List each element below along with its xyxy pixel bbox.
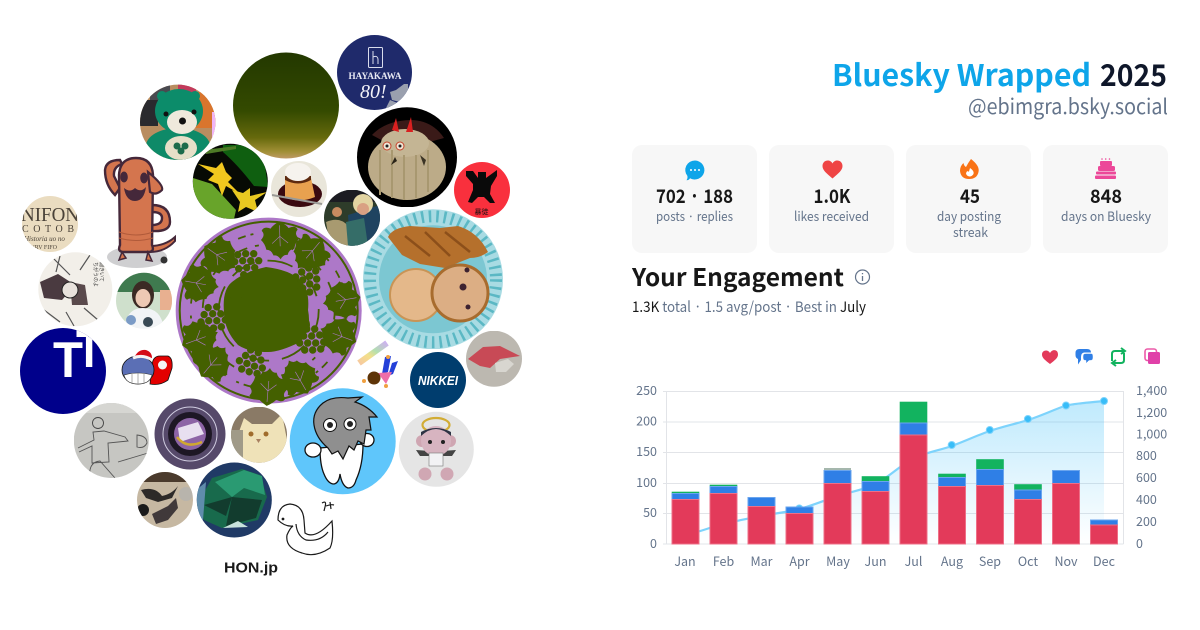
month labels: Sep bbox=[979, 551, 1001, 570]
avatar: dark green gradient photo bbox=[233, 52, 339, 159]
avatar: red brick model bbox=[466, 331, 522, 387]
avatar: manga panel bbox=[38, 252, 113, 327]
right axis labels: 1,000 bbox=[1136, 424, 1167, 442]
handle: @ebimgra.bsky.social bbox=[968, 91, 1168, 121]
title year: 2025 bbox=[1100, 51, 1167, 95]
left axis labels: 50 bbox=[643, 502, 657, 521]
avatar: Hayakawa 80 logo: 80! bbox=[360, 81, 387, 103]
avatar: red wrestler silhouette: 暴徒 bbox=[474, 207, 488, 217]
month labels: Jan bbox=[674, 551, 696, 570]
right axis labels: 600 bbox=[1136, 467, 1157, 486]
title: Bluesky Wrapped bbox=[832, 51, 1091, 95]
month labels: Dec bbox=[1093, 551, 1116, 570]
month labels: Oct bbox=[1018, 551, 1038, 570]
card: posts and replies bbox=[632, 145, 757, 253]
avatar: manga panel: 聞きいて bbox=[98, 262, 105, 282]
icon: info bbox=[856, 270, 870, 284]
grape clusters bbox=[194, 250, 327, 380]
bar: Jan bbox=[672, 492, 699, 544]
chart: monthly engagement bbox=[636, 380, 1167, 570]
bar: Oct bbox=[1014, 484, 1042, 544]
stat label: likes received bbox=[794, 206, 869, 225]
bar: Jul bbox=[900, 402, 927, 544]
bar: Aug bbox=[938, 474, 966, 544]
bar: Apr bbox=[786, 507, 813, 544]
icon: heart bbox=[822, 160, 842, 178]
stat value: 45 bbox=[960, 182, 980, 209]
avatar: Nifon Cotoba book page: Historia uo no bbox=[23, 235, 65, 243]
card: days on Bluesky bbox=[1043, 145, 1168, 253]
avatar: green teddy bear bbox=[140, 84, 216, 164]
month labels: Feb bbox=[713, 551, 734, 570]
bar: Mar bbox=[748, 498, 775, 544]
month labels: Jun bbox=[865, 551, 886, 570]
avatar: navy TI logo: I bbox=[83, 328, 95, 377]
cumulative line bbox=[685, 401, 1104, 535]
stat label: days on Bluesky bbox=[1061, 206, 1151, 225]
month labels: Nov bbox=[1054, 551, 1078, 570]
logo: HON.jp: HON.jp bbox=[224, 560, 278, 576]
avatar: red wrestler silhouette bbox=[454, 162, 510, 218]
right axis labels: 1,200 bbox=[1136, 402, 1167, 421]
icon: likes bbox=[1042, 350, 1058, 364]
month labels: Mar bbox=[750, 551, 773, 570]
month labels: Aug bbox=[941, 551, 963, 570]
left axis labels: 0 bbox=[650, 533, 657, 552]
avatar: Nifon Cotoba book page: COTOB bbox=[22, 224, 74, 235]
engagement summary: 1.3K total · 1.5 avg/post · Best in July bbox=[632, 296, 866, 317]
icon: replies bbox=[1076, 349, 1093, 364]
avatar: grey-haired monster on sky blue bbox=[289, 388, 397, 496]
right axis labels bbox=[1136, 380, 1167, 552]
avatar: angel figure bbox=[398, 411, 474, 487]
card: likes received bbox=[769, 145, 894, 253]
icon: flame bbox=[960, 159, 979, 179]
sticker: snake doodle bbox=[278, 502, 334, 555]
cumulative area bbox=[685, 402, 1104, 544]
sticker: whale with santa hat bbox=[122, 350, 172, 384]
header bbox=[832, 51, 1168, 121]
avatar: Hayakawa 80 logo: HAYAKAWA bbox=[348, 71, 402, 81]
bar: Nov bbox=[1052, 470, 1080, 544]
avatar: navy TI logo bbox=[20, 328, 106, 414]
right axis labels: 800 bbox=[1136, 445, 1157, 464]
icon: chat bubble bbox=[685, 160, 704, 180]
left axis labels: 150 bbox=[636, 441, 657, 460]
avatar: Nikkei logo: NIKKEI bbox=[418, 373, 458, 388]
avatar collage bbox=[20, 35, 522, 576]
avatar: cats on a table bbox=[137, 472, 193, 528]
bar: Jun bbox=[862, 476, 889, 544]
avatar: Hayakawa 80 logo bbox=[337, 35, 412, 110]
icon: birthday cake bbox=[1095, 158, 1116, 179]
vine scrolls bbox=[191, 233, 347, 389]
grape leaves bbox=[176, 221, 364, 408]
avatar: navy TI logo: T bbox=[53, 332, 83, 388]
bar: Dec bbox=[1090, 520, 1118, 544]
avatar: woman portrait bbox=[116, 272, 172, 330]
heading: Your Engagement: Your Engagement bbox=[631, 259, 844, 294]
right axis labels: 0 bbox=[1136, 533, 1143, 552]
sticker: terracotta dog waving bbox=[105, 158, 175, 268]
right axis labels: 400 bbox=[1136, 489, 1157, 508]
avatar: pencil sketch figure bbox=[74, 403, 149, 478]
left axis labels bbox=[636, 380, 657, 552]
cumulative points bbox=[796, 398, 1108, 512]
stat label second line: streak bbox=[953, 222, 989, 241]
avatar: green crystal polygon bbox=[196, 462, 272, 538]
avatar: cookies on blue plate bbox=[363, 209, 503, 349]
stat value: 702 · 188 bbox=[656, 182, 733, 209]
avatar: purple crystal badge bbox=[154, 398, 226, 470]
left axis labels: 200 bbox=[636, 410, 657, 430]
right axis labels: 200 bbox=[1136, 511, 1157, 530]
month labels: May bbox=[826, 551, 850, 570]
avatar: pudding bbox=[271, 161, 327, 217]
avatar: two men bbox=[324, 190, 380, 246]
avatar: purple and green grapevine plate bbox=[176, 218, 364, 408]
month labels: Jul bbox=[905, 551, 922, 570]
stat label: posts · replies bbox=[656, 206, 733, 225]
avatar: yellow tomato flower bbox=[192, 143, 268, 219]
panel: stat cards bbox=[632, 145, 1168, 253]
grid lines bbox=[663, 391, 1124, 544]
bar: Sep bbox=[976, 460, 1004, 544]
stat value: 1.0K bbox=[814, 182, 851, 209]
stacked bars bbox=[672, 402, 1118, 544]
left axis labels: 250 bbox=[636, 380, 657, 399]
stat label: day posting bbox=[937, 206, 1002, 225]
chart legend icons bbox=[1042, 348, 1160, 366]
bar: May bbox=[824, 468, 851, 544]
left axis labels: 100 bbox=[636, 472, 657, 491]
icon: quotes bbox=[1145, 349, 1160, 364]
avatar: white persian cat bbox=[231, 407, 287, 463]
avatar: fluffy owl on black bbox=[357, 107, 457, 207]
right axis labels: 1,400 bbox=[1136, 380, 1167, 399]
stat value: 848 bbox=[1090, 182, 1122, 209]
month labels: Apr bbox=[789, 551, 810, 570]
month labels bbox=[674, 551, 1116, 570]
icon: reposts bbox=[1112, 348, 1125, 366]
avatar: manga panel: ちがうのよ bbox=[92, 262, 99, 287]
bar: Feb bbox=[710, 485, 737, 544]
card: day posting streak bbox=[906, 145, 1031, 253]
avatar: Nifon Cotoba book page: XVRV FIFO bbox=[26, 245, 58, 251]
sticker: rainbow and upside-down doll bbox=[359, 343, 398, 388]
avatar: Nifon Cotoba book page: NIFON bbox=[21, 204, 79, 226]
avatar: Nikkei logo bbox=[410, 352, 466, 408]
avatar: Nifon Cotoba book page bbox=[21, 196, 79, 252]
